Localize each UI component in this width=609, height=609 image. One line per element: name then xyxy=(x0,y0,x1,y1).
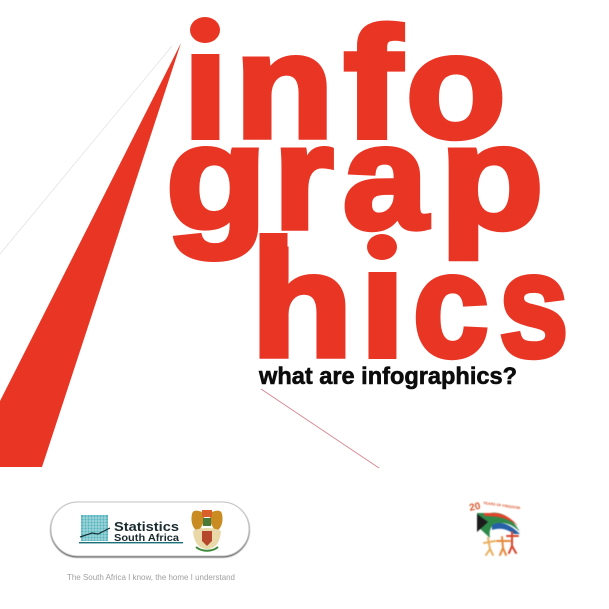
subtitle: what are infographics? xyxy=(258,363,517,390)
pill shape xyxy=(51,502,249,556)
title row 3: hics: c xyxy=(413,224,489,388)
logo wordmark: South Africa xyxy=(114,533,179,544)
emblem heading: 20 xyxy=(468,501,482,514)
title row 3: hics: h xyxy=(251,224,353,388)
logo pill: Statistics South Africa xyxy=(51,502,249,556)
icon: coat of arms xyxy=(191,510,223,551)
title row 2: grap: r xyxy=(274,95,333,259)
title row 2: grap: a xyxy=(343,95,429,259)
title row 3: hics: s xyxy=(499,222,568,387)
title row 1: info xyxy=(190,17,502,142)
title row 2: grap xyxy=(166,95,544,260)
emblem figures xyxy=(484,532,518,555)
logo wordmark: Statistics xyxy=(114,520,179,534)
red wedge xyxy=(0,43,181,467)
title row 2: grap: g xyxy=(166,96,267,260)
emblem flag xyxy=(477,513,520,538)
title row 3: hics: i xyxy=(360,211,405,390)
title row 2: grap: p xyxy=(440,95,544,260)
emblem arc text: YEARS OF FREEDOM xyxy=(483,501,520,510)
title row 3: hics xyxy=(260,233,566,360)
title row 1: info: o xyxy=(406,3,506,168)
tagline: The South Africa I know, the home I understand xyxy=(67,572,235,582)
title row 1: info: f xyxy=(344,0,403,170)
logo: 20 years of freedom xyxy=(468,501,520,555)
title: infographics xyxy=(170,17,566,360)
thin grey diagonal line xyxy=(0,46,172,254)
icon: statistics grid xyxy=(79,515,183,543)
logo wordmark xyxy=(114,520,179,544)
thin red diagonal line xyxy=(261,389,379,468)
title row 1: info: n xyxy=(235,4,334,168)
